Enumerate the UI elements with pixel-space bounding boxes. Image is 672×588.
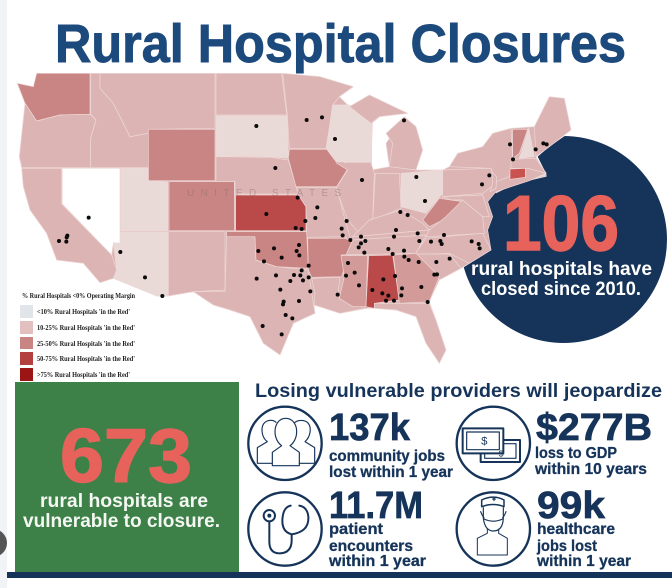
callout circle: 106 closed hospitals: [460, 136, 667, 343]
map legend: [20, 293, 135, 381]
stat: loss to GDP: within 10 years: [534, 461, 647, 478]
stat: patient encounters: patient: [329, 521, 384, 538]
map legend: 10-25% Rural Hospitals 'in the Red': [37, 325, 135, 332]
stat: community jobs: lost within 1 year: [329, 464, 453, 481]
stat: healthcare jobs: 99k: [537, 485, 606, 527]
stat: healthcare jobs: [457, 485, 631, 570]
stat: community jobs: community jobs: [329, 448, 445, 465]
stat: patient encounters: 11.7M: [329, 485, 423, 527]
callout circle: 106 closed hospitals: 106: [503, 179, 619, 267]
stat: community jobs: 137k: [329, 407, 411, 449]
map label: United States: UNITED STATES: [187, 188, 348, 199]
panel: 673 vulnerable hospitals: rural hospitals are: [40, 490, 208, 512]
heading: losing vulnerable providers: Losing vulnerable providers will jeopardize: [255, 381, 662, 402]
stat: patient encounters: [248, 485, 426, 570]
stat: patient encounters: encounters: [329, 538, 413, 555]
map legend: 25-50% Rural Hospitals 'in the Red': [37, 341, 135, 348]
footer bar: [7, 572, 672, 578]
map legend: <10% Rural Hospitals 'in the Red': [37, 309, 130, 316]
stat: loss to GDP: loss to GDP: [535, 445, 617, 462]
icon: people: [248, 407, 322, 480]
icon: money: $: [499, 449, 504, 459]
icon: money: $: [481, 436, 488, 448]
stat: healthcare jobs: within 1 year: [536, 553, 631, 570]
icon: money: [457, 407, 530, 480]
title: Rural Hospital Closures: [55, 14, 626, 74]
map legend: >75% Rural Hospitals 'in the Red': [37, 372, 130, 379]
panel: 673 vulnerable hospitals: vulnerable to closure.: [23, 510, 220, 532]
stat: community jobs: [248, 407, 453, 481]
stat: healthcare jobs: healthcare: [537, 521, 615, 538]
map: rural hospitals in the red by state: [17, 73, 571, 363]
hospital closure dots: [57, 115, 549, 336]
icon: stethoscope: [248, 492, 322, 566]
callout circle: 106 closed hospitals: closed since 2010.: [481, 279, 641, 300]
panel: 673 vulnerable hospitals: 673: [60, 414, 192, 499]
stat: loss to GDP: [457, 407, 652, 480]
map legend: % Rural Hospitals <0% Operating Margin: [22, 293, 135, 300]
stat: loss to GDP: $277B: [536, 407, 652, 449]
map legend: 50-75% Rural Hospitals 'in the Red': [37, 356, 135, 363]
panel: 673 vulnerable hospitals: [15, 382, 239, 572]
icon: nurse: [457, 492, 530, 566]
callout circle: 106 closed hospitals: rural hospitals have: [471, 259, 652, 280]
stat: patient encounters: within 1 year: [328, 553, 426, 570]
stat: healthcare jobs: jobs lost: [536, 538, 598, 555]
gray circle at left edge: [0, 529, 7, 557]
